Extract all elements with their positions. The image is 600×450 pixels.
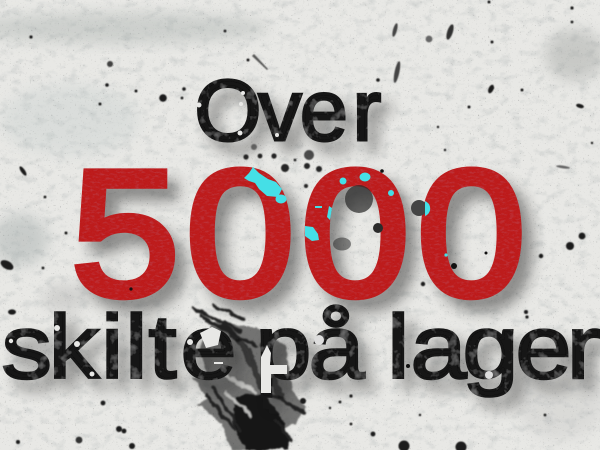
paint chips on the black letters bbox=[9, 91, 493, 393]
drop shadows of the text: 5000 bbox=[82, 145, 537, 345]
heading: Over: Over bbox=[194, 63, 381, 159]
dark blots over the zeros bbox=[333, 185, 430, 250]
heading: skilte på lager: skilte på lager bbox=[1, 298, 600, 398]
heading: 5000: 5000 bbox=[71, 133, 526, 333]
drop shadows of the text: skilte på lager bbox=[11, 309, 600, 409]
ink brush stroke behind lower text bbox=[193, 305, 305, 450]
ink splatter: drops between Over and 5000 bbox=[243, 144, 322, 188]
drop shadows of the text bbox=[11, 74, 600, 409]
drop shadows of the text: Over bbox=[204, 74, 391, 170]
small specks over the 5000 bbox=[129, 169, 488, 368]
cyan paint splashes bbox=[244, 167, 448, 257]
